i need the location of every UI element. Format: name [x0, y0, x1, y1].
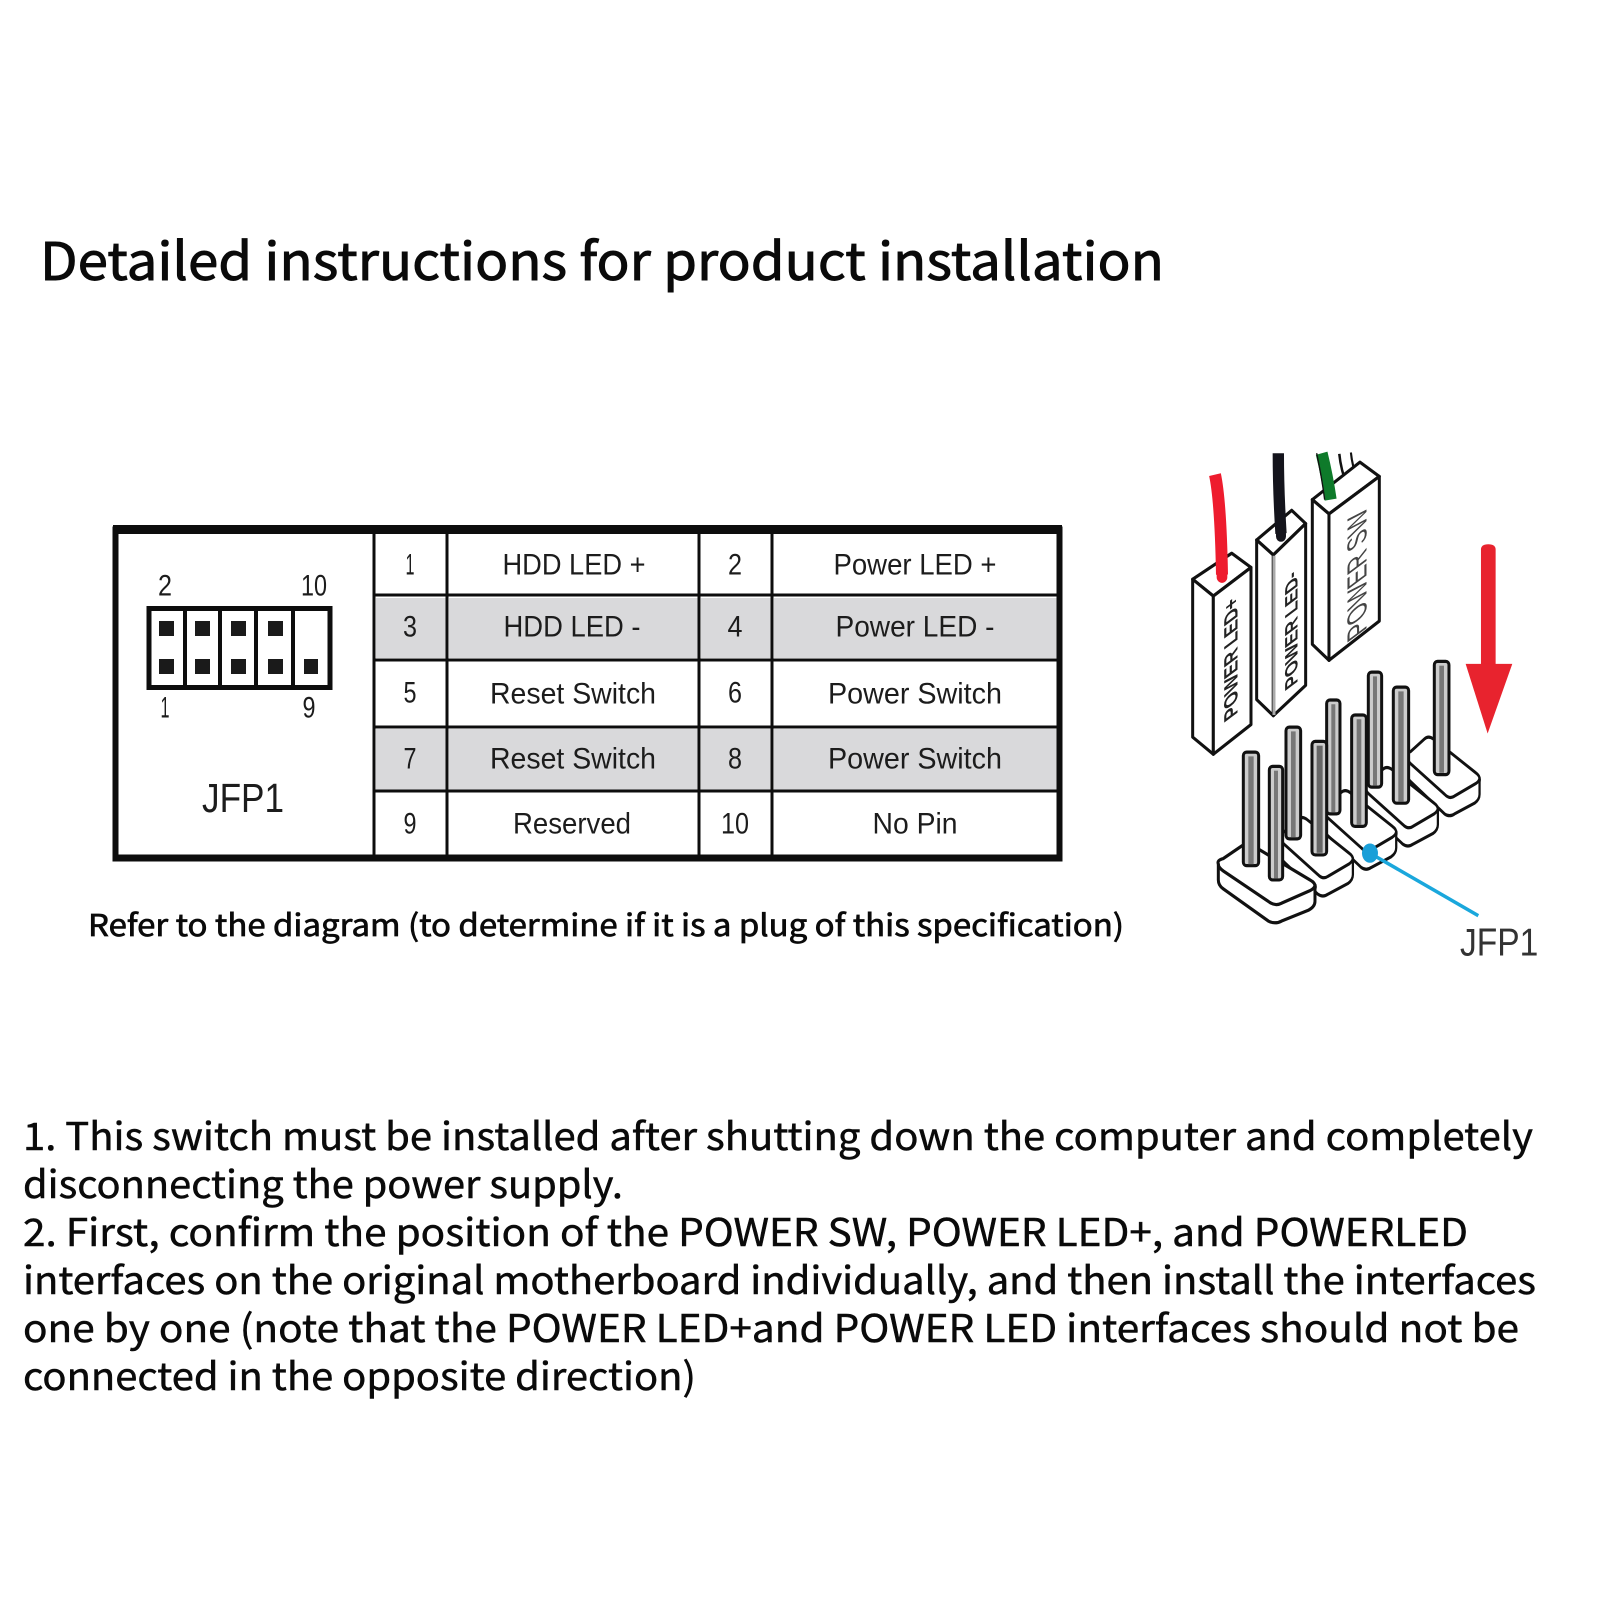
panel: JFP1 pin table	[113, 530, 1062, 858]
red wire	[1215, 475, 1222, 575]
connector: POWER LED+: POWER LED+	[1220, 591, 1242, 727]
table text: No Pin	[872, 808, 958, 840]
table text: 6	[728, 676, 742, 710]
table text: Reset Switch	[490, 742, 656, 776]
pin header diagram: 2	[158, 570, 172, 602]
pin header diagram: 9	[302, 692, 316, 724]
table text: 8	[728, 742, 742, 776]
table text: Power Switch	[828, 678, 1002, 710]
connector: POWER SW	[1312, 462, 1379, 660]
table text	[403, 548, 1002, 840]
caption: Refer to the diagram (to determine if it is a plug of this specification)	[88, 901, 1124, 945]
instructions text: one by one (note that the POWER LED+and POWER LED interfaces should not be	[23, 1298, 1519, 1353]
black wire	[1278, 453, 1281, 534]
table text: Reset Switch	[490, 678, 656, 710]
JFP1 label: JFP1	[202, 775, 284, 821]
instructions text: disconnecting the power supply.	[23, 1154, 623, 1209]
connector: POWER SW: POWER SW	[1342, 500, 1373, 649]
table text: Power Switch	[828, 742, 1002, 776]
table text: 5	[404, 676, 416, 710]
table text: HDD LED +	[502, 548, 646, 582]
pin header diagram: 10	[301, 570, 327, 602]
pin header diagram	[149, 570, 330, 724]
connector and header illustration	[1193, 451, 1538, 964]
table text: Power LED +	[834, 548, 996, 582]
table text: 7	[404, 742, 416, 776]
instructions text: connected in the opposite direction)	[23, 1346, 696, 1401]
JFP1 callout label: JFP1	[1460, 921, 1538, 964]
instructions text: interfaces on the original motherboard individually, and then install the interfaces	[23, 1250, 1536, 1305]
table text: 4	[728, 610, 742, 644]
connector: POWER LED-: POWER LED-	[1282, 565, 1302, 694]
green wire	[1322, 453, 1331, 500]
table text: 1	[406, 548, 414, 582]
table text: 9	[404, 808, 416, 840]
instructions text: 2. First, confirm the position of the POWER SW, POWER LED+, and POWERLED	[23, 1202, 1468, 1257]
instructions text: 1. This switch must be installed after shutting down the computer and completely	[23, 1106, 1533, 1161]
connector: POWER LED+	[1193, 553, 1251, 754]
table shaded rows	[376, 598, 1057, 790]
red arrow	[1466, 544, 1512, 734]
table text: 3	[403, 610, 417, 644]
pin header pads and pins	[1218, 661, 1480, 923]
table text: HDD LED -	[504, 610, 640, 644]
table text: Reserved	[513, 808, 631, 840]
table grid lines	[113, 530, 1062, 858]
pin header diagram: 1	[160, 692, 170, 724]
table text: 10	[721, 808, 749, 840]
title: Detailed instructions for product installation	[40, 220, 1164, 295]
table text: Power LED -	[836, 610, 994, 644]
white wire	[1345, 453, 1353, 484]
instructions text	[23, 1106, 1536, 1401]
table text: 2	[728, 548, 742, 582]
blue leader line	[1362, 844, 1478, 916]
connector: POWER LED-	[1257, 510, 1306, 716]
